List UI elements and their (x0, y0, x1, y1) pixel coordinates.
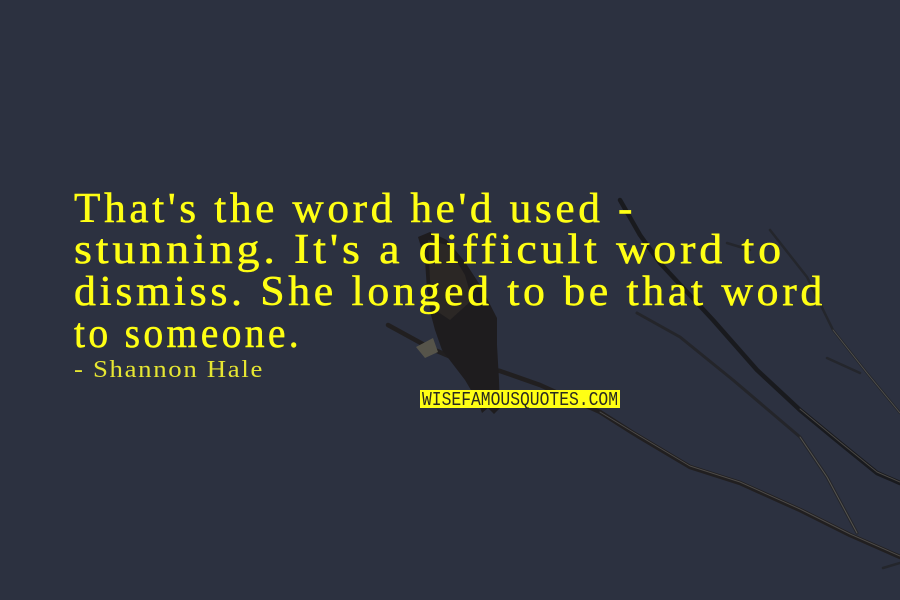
quote text (74, 186, 826, 357)
quote text: dismiss. She longed to be that word (74, 269, 826, 315)
bird (416, 232, 500, 414)
attribution: - Shannon Hale (74, 357, 264, 383)
quote text: to someone. (74, 311, 302, 357)
watermark badge: WISEFAMOUSQUOTES.COM (422, 389, 618, 411)
quote text: That's the word he'd used - (74, 186, 636, 232)
quote text: stunning. It's a difficult word to (74, 227, 785, 273)
branches (388, 200, 900, 568)
